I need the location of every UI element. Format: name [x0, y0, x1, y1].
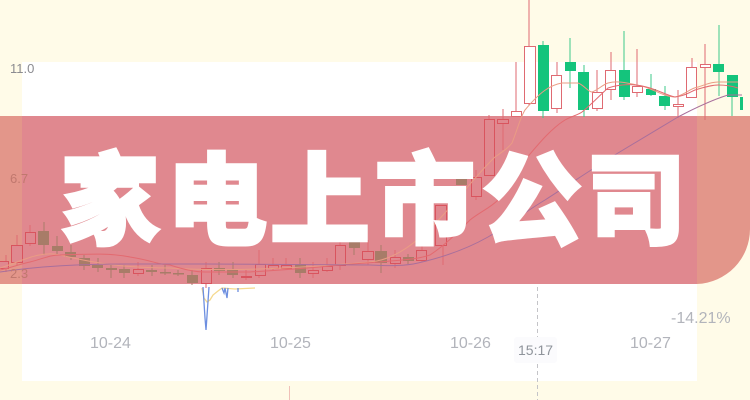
crosshair vertical line: [536, 287, 538, 400]
chart: price candlesticks: [0, 0, 743, 288]
axis labels: y values: 2.3: [10, 266, 28, 281]
axis labels: x dates: 10-25: [270, 335, 311, 352]
time tag: 15:17: [514, 337, 557, 363]
axis labels: y values: 11.0: [10, 61, 34, 76]
axis labels: x dates: 10-26: [450, 335, 491, 352]
axis labels: x dates: 10-24: [90, 335, 131, 352]
candles: falling, muted in band: [38, 176, 467, 285]
axis labels: x dates: [90, 335, 671, 352]
axis labels: y values: 6.7: [10, 171, 28, 186]
title: 家电上市公司: [60, 120, 686, 265]
small wick below panel: [288, 386, 290, 400]
change percentage label: -14.21%: [671, 310, 731, 327]
time tag: 15:17: 15:17: [518, 342, 553, 358]
axis labels: x dates: 10-27: [630, 335, 671, 352]
candles: rising, hollow red: [0, 0, 710, 288]
candles: falling, solid green: [538, 25, 743, 118]
axis labels: y values: [10, 61, 34, 281]
title band: [0, 116, 750, 284]
chart: moving average lines: [0, 82, 742, 272]
panel: white chart area: [22, 62, 697, 381]
chart: lower indicator traces: [202, 287, 255, 330]
